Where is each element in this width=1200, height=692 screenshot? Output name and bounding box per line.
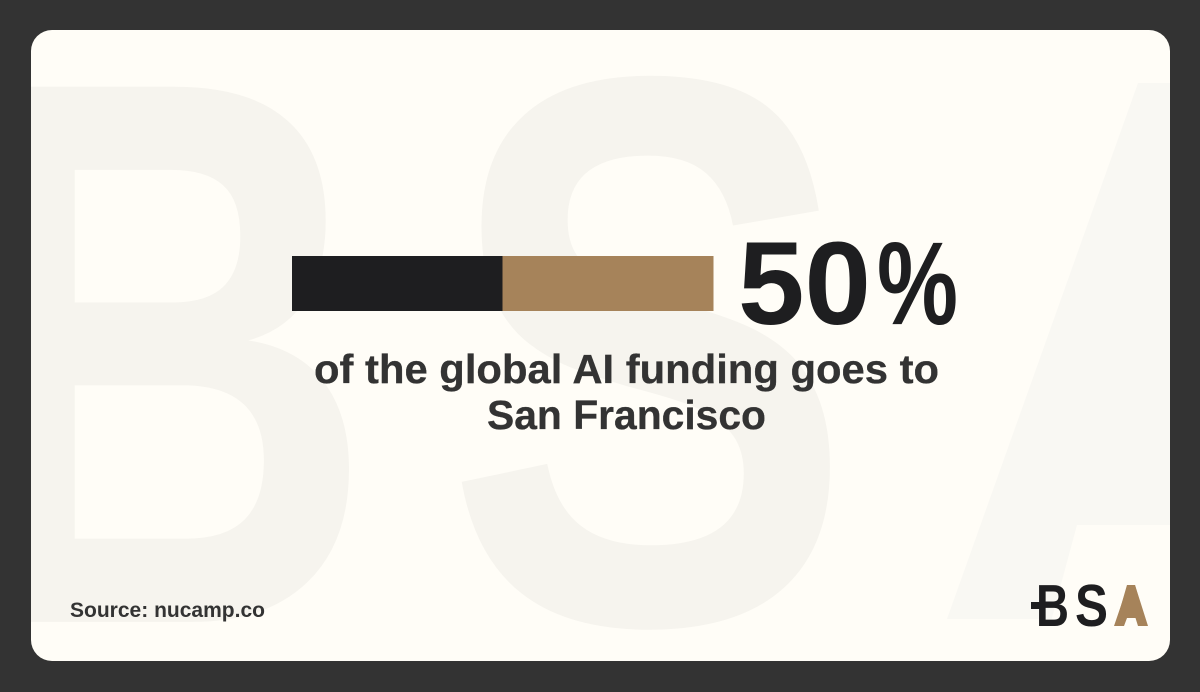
infographic content (70, 242, 1148, 626)
description text: San Francisco (487, 392, 766, 438)
logo: BSA (1031, 573, 1148, 639)
logo: BSA: A (1114, 573, 1148, 639)
source note: Source: nucamp.co (70, 598, 265, 622)
bar segment: dark share (292, 256, 502, 311)
logo: BSA: B (1036, 573, 1069, 639)
bar segment: gold share (502, 256, 714, 311)
logo: BSA: S (1075, 573, 1108, 639)
bar chart: 50 percent progress bar (292, 256, 714, 311)
big number: % (877, 218, 958, 350)
description text (314, 346, 939, 438)
watermark: solid A shape with notch (947, 83, 1200, 625)
big number (738, 218, 958, 350)
big number: 50 (738, 218, 871, 350)
description text: of the global AI funding goes to (314, 346, 939, 392)
